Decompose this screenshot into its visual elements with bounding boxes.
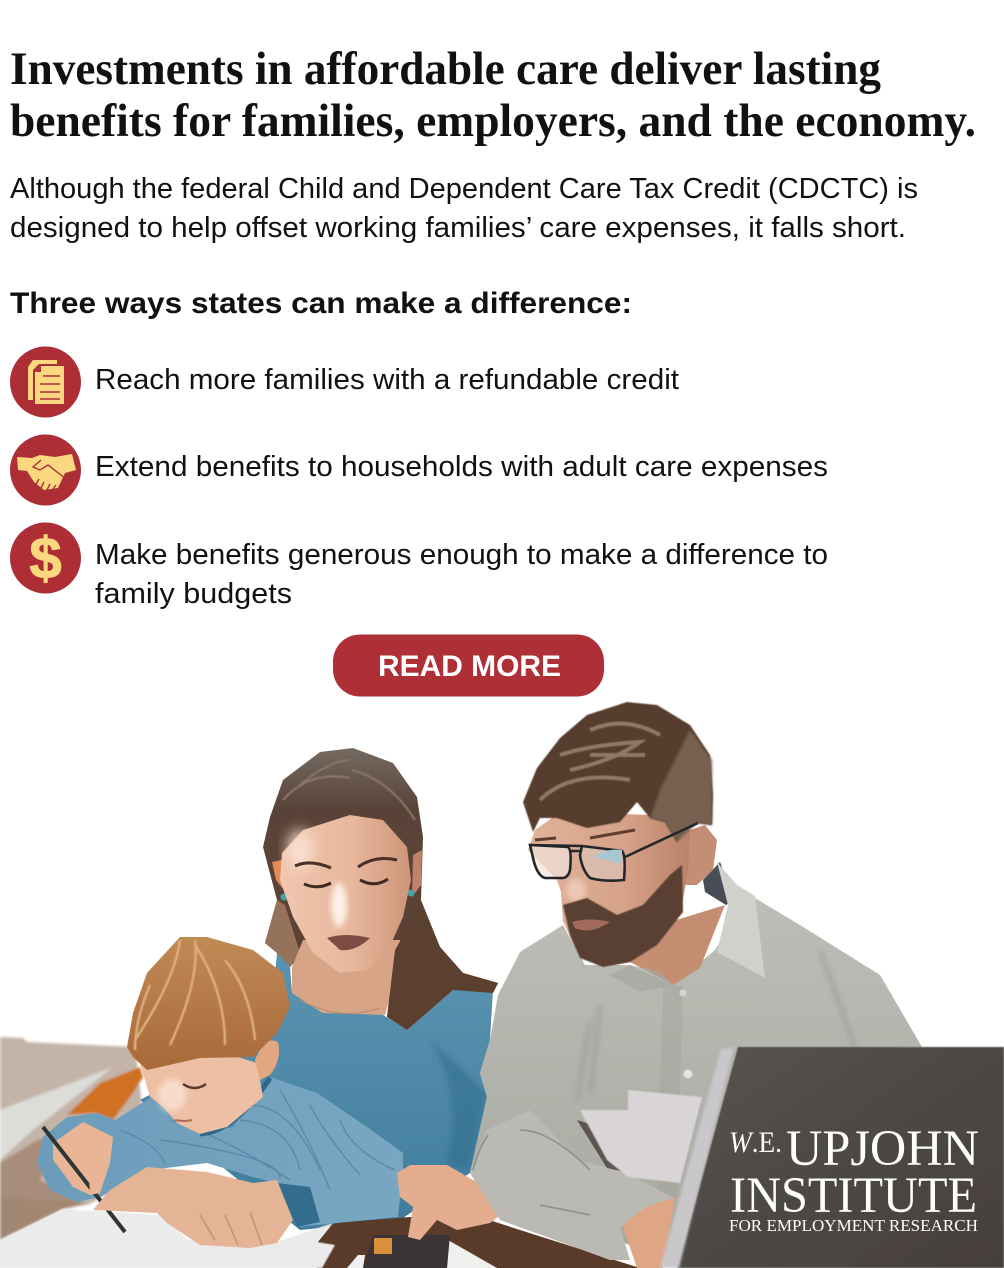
icon: documents xyxy=(10,346,81,418)
woman arm and hand xyxy=(93,1167,293,1248)
list item: refundable credit xyxy=(10,346,679,418)
man neck xyxy=(630,905,725,985)
child xyxy=(37,937,403,1232)
logo: W.E. Upjohn Institute: W.E. xyxy=(729,1126,782,1159)
icon: dollar sign xyxy=(10,522,81,594)
papers near laptop xyxy=(580,1090,702,1183)
woman hand on calculator background xyxy=(347,1240,497,1268)
list text: Extend benefits to households with adult care expenses xyxy=(95,451,828,483)
man face xyxy=(528,812,690,967)
woman right hair strand xyxy=(387,905,498,1030)
paper on table xyxy=(0,1209,335,1268)
list item: generous benefits xyxy=(10,522,828,610)
woman face xyxy=(280,815,411,973)
child face xyxy=(140,1045,263,1134)
intro text: designed to help offset working families’ care expenses, it falls short. xyxy=(10,212,906,244)
list text: Reach more families with a refundable credit xyxy=(95,364,679,396)
logo: W.E. Upjohn Institute: INSTITUTE xyxy=(730,1168,977,1224)
read more button xyxy=(333,634,604,696)
title: benefits for families, employers, and the economy. xyxy=(10,95,976,147)
man beard xyxy=(563,865,683,967)
man xyxy=(470,702,922,1268)
child hand xyxy=(53,1122,113,1195)
laptop xyxy=(660,1047,1004,1268)
child hair xyxy=(127,937,290,1070)
child hand fingers over pen xyxy=(88,1150,108,1195)
child ear xyxy=(255,1040,279,1080)
man sleeve xyxy=(470,1110,677,1260)
list text xyxy=(95,539,828,610)
man ear xyxy=(685,825,717,885)
intro text xyxy=(10,173,918,244)
subheading: Three ways states can make a difference: xyxy=(10,287,632,320)
child sweater xyxy=(37,1077,403,1227)
photo: family reviewing budget xyxy=(0,702,1004,1268)
man hair xyxy=(523,702,713,842)
icon: handshake xyxy=(10,434,81,506)
title xyxy=(10,43,976,147)
woman pointing hand xyxy=(397,1165,510,1240)
logo: W.E. Upjohn Institute: UPJOHN xyxy=(786,1121,979,1177)
pen xyxy=(43,1127,125,1232)
dark gap behind papers xyxy=(577,1120,625,1172)
read more button: READ MORE xyxy=(378,650,561,683)
woman hair xyxy=(263,748,498,1030)
logo: W.E. Upjohn Institute xyxy=(729,1121,979,1235)
man hand xyxy=(623,1198,675,1268)
intro text: Although the federal Child and Dependent Care Tax Credit (CDCTC) is xyxy=(10,173,918,205)
woman ears and earrings xyxy=(272,860,284,890)
man glasses xyxy=(530,823,698,881)
woman xyxy=(140,748,498,1230)
title: Investments in affordable care deliver lasting xyxy=(10,43,881,95)
icon: dollar sign: $ xyxy=(29,526,62,591)
man collar xyxy=(703,862,735,905)
background couch xyxy=(0,1037,150,1240)
list text: family budgets xyxy=(95,578,292,610)
logo: W.E. Upjohn Institute: FOR EMPLOYMENT RESEARCH xyxy=(729,1216,978,1235)
list text: Make benefits generous enough to make a difference to xyxy=(95,539,828,571)
table xyxy=(317,1217,640,1268)
calculator xyxy=(363,1235,450,1268)
man shirt xyxy=(470,895,922,1268)
woman shirt xyxy=(140,953,493,1230)
list item: adult care xyxy=(10,434,828,506)
woman neck xyxy=(292,940,402,1015)
